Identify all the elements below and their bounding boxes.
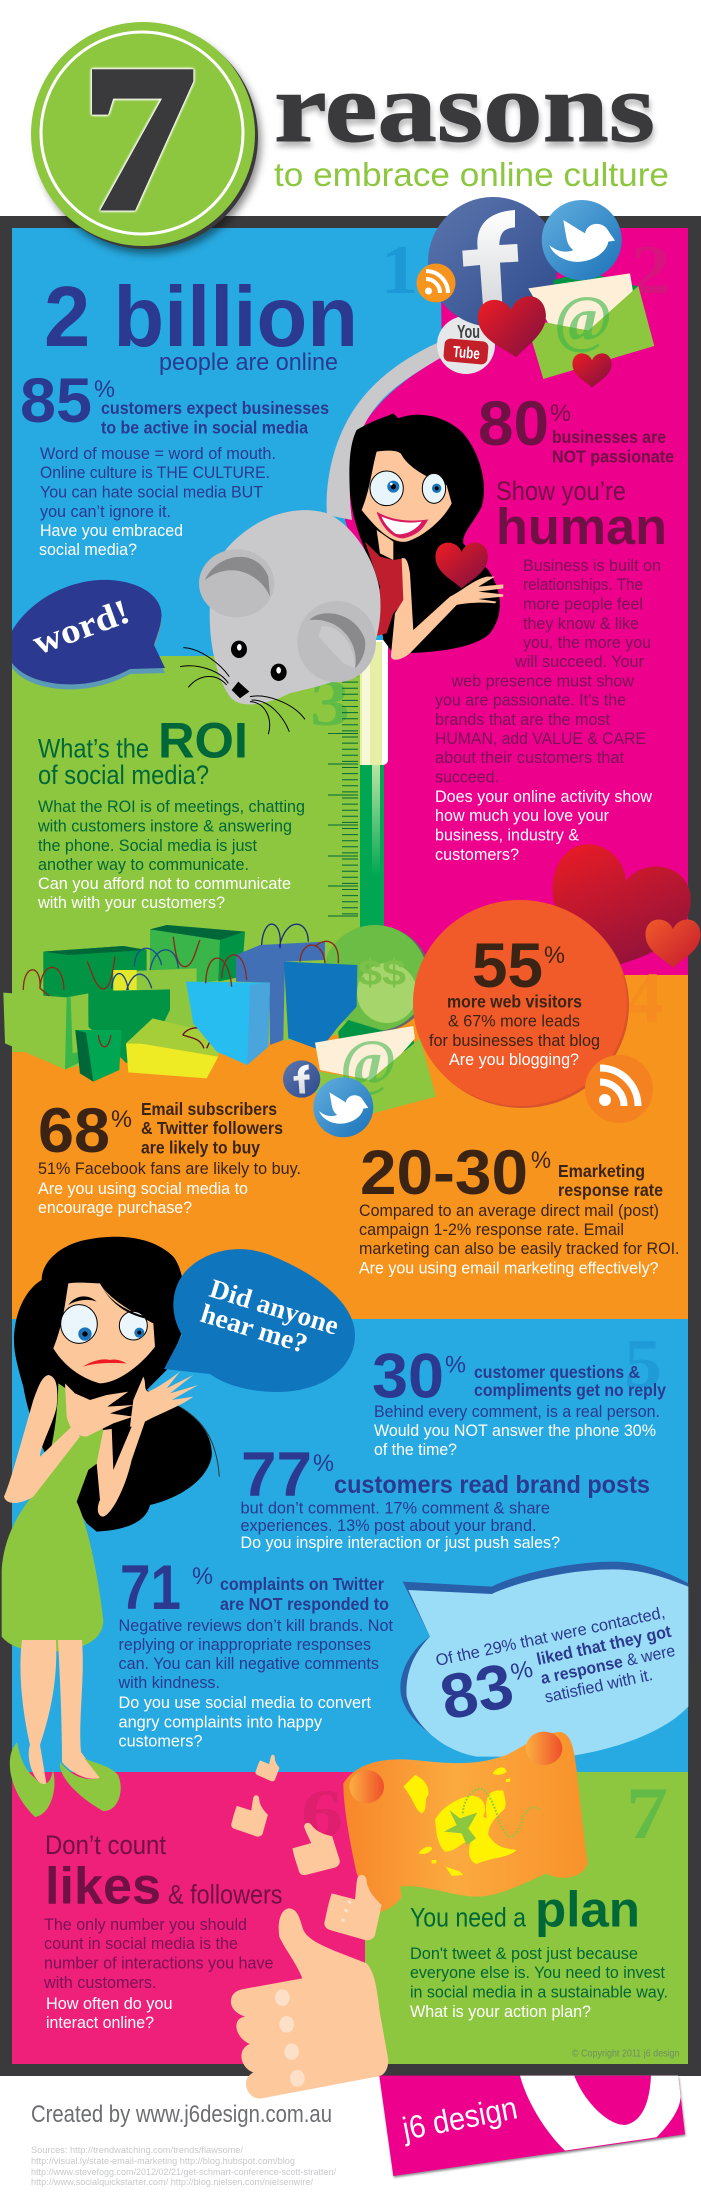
stat: 77%: experiences. 13% post about your brand.	[240, 1517, 536, 1535]
text: business relationships: they know & like	[523, 615, 639, 633]
stat: 20-30%: %	[531, 1147, 551, 1174]
sources: Sources: http://trendwatching.com/trends/flawsome/	[31, 2145, 243, 2156]
text: business relationships: more people feel	[523, 596, 643, 614]
stat: 68%: Are you using social media to	[38, 1180, 248, 1198]
stat: 85%: to be active in social media	[101, 418, 308, 438]
heading: don't count likes: & followers	[168, 1880, 282, 1910]
stat: 20-30%: Are you using email marketing effectively?	[359, 1260, 658, 1278]
text: business relationships	[435, 557, 661, 864]
panel: 55% circle: Are you blogging?	[449, 1051, 579, 1069]
title badge	[31, 22, 258, 252]
stat: 77%	[240, 1440, 650, 1552]
panel: 55% circle: more web visitors	[447, 992, 582, 1012]
text: business relationships: will succeed. Your	[514, 653, 644, 671]
sources: http://www.socialquickstarter.com/ http://blog.nielsen.com/nielsenwire/	[31, 2177, 313, 2188]
stat: 68%	[38, 1096, 301, 1217]
text: word of mouse: Word of mouse = word of mouth.	[40, 445, 276, 463]
stat: 30%: 30	[372, 1342, 444, 1412]
stat: 77%: Do you inspire interaction or just push sales?	[240, 1534, 560, 1552]
stat: 80%: NOT passionate	[552, 446, 674, 466]
stat: 20-30%	[359, 1138, 680, 1278]
panel: 55% circle	[413, 900, 629, 1108]
stat: 85%	[20, 366, 329, 438]
text: action plan: Don't tweet & post just because	[410, 1945, 638, 1963]
text: word of mouse: Have you embraced	[40, 522, 183, 540]
stat: 68%: & Twitter followers	[141, 1118, 283, 1138]
heading: don't count likes	[45, 1830, 282, 1916]
heading: don't count likes: likes	[45, 1858, 161, 1916]
heading: don't count likes: Don’t count	[45, 1830, 166, 1860]
callout: 83%: 83	[434, 1650, 519, 1734]
text: business relationships: relationships. The	[523, 576, 643, 594]
text: interactions: count in social media is the	[44, 1935, 238, 1953]
stat: 2 billion: people are online	[159, 349, 338, 376]
stat: 30%: of the time?	[374, 1441, 457, 1459]
stat: 80%: businesses are	[552, 427, 666, 447]
section numbers: 4	[626, 958, 663, 1038]
icon: treasure map	[343, 1732, 588, 1913]
heading: you need a plan: plan	[535, 1882, 640, 1938]
title badge: 7	[83, 25, 195, 252]
text: interactions: How often do you	[46, 1995, 172, 2013]
text: action plan: in social media in a sustainable way.	[410, 1984, 668, 2002]
section numbers: 5	[624, 1326, 662, 1403]
text: ROI: with customers instore & answering	[37, 818, 292, 836]
stat: 20-30%: Compared to an average direct mail (post)	[359, 1202, 659, 1220]
stat: 71%: 71	[120, 1553, 181, 1623]
stat: 77%: but don’t comment. 17% comment & share	[240, 1500, 550, 1518]
heading: what's the ROI: of social media?	[38, 760, 209, 790]
text: ROI: What the ROI is of meetings, chatting	[38, 798, 305, 816]
text: word of mouse: you can’t ignore it.	[40, 503, 171, 521]
text: business relationships: succeed.	[435, 768, 499, 786]
stat: 30%: compliments get no reply	[474, 1380, 666, 1400]
thermometer	[322, 640, 431, 1032]
heading: you need a plan	[410, 1882, 640, 1938]
sources: http://www.stevefogg.com/2012/02/21/get-schmart-conference-scott-stratten/	[31, 2167, 336, 2178]
stat: 85%: %	[94, 376, 115, 403]
icon: YouTube: Tube	[452, 344, 481, 363]
text: business relationships: customers?	[435, 846, 519, 864]
stat: 20-30%: response rate	[558, 1180, 663, 1200]
icon: thumbs up small 2	[231, 1794, 269, 1837]
logo card: j6 design	[379, 2076, 685, 2176]
text: action plan	[410, 1945, 668, 2021]
heading: what's the ROI	[38, 712, 248, 790]
text: interactions: number of interactions you have	[44, 1954, 274, 1972]
icon: large heart	[529, 836, 700, 996]
stat: 20-30%: campaign 1-2% response rate. Email	[359, 1221, 624, 1239]
sources	[31, 2145, 336, 2188]
stat: 20-30%: Emarketing	[558, 1161, 645, 1181]
icon: envelope	[528, 272, 654, 379]
text: word of mouse: social media?	[39, 541, 137, 559]
section numbers: 2	[631, 232, 671, 309]
icon: Facebook	[428, 197, 558, 327]
character: smiling woman	[349, 413, 503, 660]
speech bubble: did anyone hear me: hear me?	[197, 1298, 311, 1359]
stat: 30%: customer questions &	[474, 1362, 640, 1382]
stat: 71%: with kindness.	[118, 1674, 220, 1692]
character: mouse	[180, 510, 381, 734]
heading: show you're human: Show you’re	[496, 476, 626, 506]
section numbers: 7	[626, 1773, 668, 1855]
text: word of mouse: You can hate social media BUT	[40, 484, 263, 502]
stat: 71%: Negative reviews don’t kill brands. Not	[118, 1617, 393, 1635]
text: ROI	[37, 798, 305, 912]
title: reasons	[274, 52, 655, 163]
stat: 80%: %	[550, 400, 571, 427]
icon: heart large	[476, 295, 550, 361]
stat: 77%: %	[313, 1450, 334, 1477]
stat: 30%: Would you NOT answer the phone 30%	[374, 1422, 656, 1440]
text: business relationships: Business is built on	[523, 557, 661, 575]
icon: small orange heart	[646, 920, 700, 968]
stat: 2 billion: 2 billion	[44, 270, 358, 365]
text: interactions	[43, 1916, 274, 2032]
logo card: j6 design: j6 design	[399, 2089, 520, 2147]
icon: envelope: @	[554, 283, 612, 355]
sources: http://visual.ly/state-email-marketing http://blog.hubspot.com/blog	[31, 2156, 295, 2167]
icon: thumbs up small 4	[324, 1875, 382, 1940]
icon: YouTube	[437, 316, 495, 374]
stat: 71%: replying or inappropriate responses	[118, 1636, 371, 1654]
text: ROI: with with your customers?	[37, 894, 225, 912]
section numbers	[301, 232, 671, 1855]
text: ROI: the phone. Social media is just	[38, 837, 257, 855]
stat: 68%: %	[111, 1106, 132, 1133]
stat: 68%: are likely to buy	[141, 1138, 260, 1158]
text: business relationships: you, the more you	[523, 634, 651, 652]
stat: 77%: customers read brand posts	[334, 1471, 650, 1499]
callout: 83%: satisfied with it.	[543, 1666, 654, 1707]
text: business relationships: about their customers that	[435, 749, 624, 767]
section numbers: 6	[301, 1775, 343, 1851]
text: word of mouse: Online culture is THE CULTURE.	[40, 464, 270, 482]
section numbers: 3	[310, 667, 350, 740]
stat: 71%: can. You can kill negative comments	[118, 1655, 379, 1673]
callout: 83%	[400, 1562, 688, 1757]
copyright: © Copyright 2011 j6 design	[572, 2048, 680, 2060]
stat: 71%: are NOT responded to	[220, 1594, 389, 1614]
shopping bags	[3, 924, 357, 1082]
stat: 71%	[118, 1553, 393, 1750]
stat: 71%: Do you use social media to convert	[118, 1694, 371, 1712]
icon: heart small	[572, 353, 612, 388]
stat: 20-30%: marketing can also be easily tracked for ROI.	[359, 1240, 680, 1258]
thermometer: $$	[358, 952, 406, 993]
heading: show you're human: human	[496, 498, 667, 555]
text: ROI: another way to communicate.	[38, 856, 249, 874]
stat: 30%	[372, 1342, 666, 1459]
text: business relationships: brands that are the most	[435, 711, 610, 729]
heading: what's the ROI: ROI	[158, 712, 248, 768]
heading: you need a plan: You need a	[410, 1902, 527, 1932]
stat: 68%: 68	[38, 1096, 110, 1166]
speech bubble: word!: word!	[27, 592, 135, 663]
icon: thumbs up small 3	[280, 1815, 346, 1884]
stat: 80%	[478, 389, 674, 466]
stat: 68%: Email subscribers	[141, 1099, 277, 1119]
speech bubble: word!	[12, 580, 165, 689]
text: action plan: everyone else is. You need to invest	[410, 1964, 665, 1982]
mouse cord	[327, 343, 442, 520]
stat: 71%: angry complaints into happy	[118, 1714, 323, 1732]
text: ROI: Can you afford not to communicate	[38, 875, 291, 893]
stat: 30%: %	[445, 1352, 466, 1378]
heading: what's the ROI: What’s the	[38, 734, 149, 764]
stat: 20-30%: 20-30	[360, 1138, 528, 1208]
stat: 85%: customers expect businesses	[101, 398, 329, 418]
panel: 55% circle: for businesses that blog	[429, 1032, 600, 1050]
text: interactions: with customers.	[43, 1974, 156, 1992]
stat: 30%: Behind every comment, is a real person.	[374, 1403, 660, 1421]
text: business relationships: HUMAN, add VALUE & CARE	[435, 730, 646, 748]
section numbers: 1	[381, 232, 418, 309]
text: business relationships: Does your online activity show	[435, 788, 652, 806]
text: interactions: interact online?	[46, 2014, 154, 2032]
credit: Created by www.j6design.com.au	[31, 2101, 332, 2128]
stat: 71%: complaints on Twitter	[220, 1574, 384, 1594]
stat: 71%: customers?	[118, 1732, 202, 1750]
text: action plan: What is your action plan?	[410, 2003, 591, 2021]
stat: 71%: %	[192, 1563, 213, 1590]
text: business relationships: web presence must show	[451, 672, 634, 690]
panel: 55% circle: %	[544, 942, 565, 969]
text: business relationships: how much you love your	[435, 807, 609, 825]
icon: thumbs up small 1	[254, 1753, 281, 1782]
icon: Twitter	[542, 200, 622, 280]
speech bubble: did anyone hear me	[164, 1249, 355, 1392]
text: business relationships: business, industry &	[435, 826, 579, 844]
callout: 83%: %	[508, 1656, 535, 1687]
stat: 77%: 77	[241, 1440, 312, 1510]
icon: YouTube: You	[457, 322, 480, 342]
callout: 83%: Of the 29% that were contacted,	[434, 1604, 667, 1670]
text: interactions: The only number you should	[44, 1916, 247, 1934]
icon: envelope and social badges	[283, 1020, 436, 1137]
callout: 83%: liked that they got	[535, 1622, 673, 1669]
panel: 55% circle: & 67% more leads	[448, 1012, 580, 1030]
panel: 55% circle: 55	[472, 931, 543, 1001]
text: business relationships: you are passionate. It’s the	[435, 692, 626, 710]
icon: large RSS	[585, 1055, 653, 1123]
icon: envelope and social badges: @	[340, 1027, 397, 1097]
icon: RSS	[416, 264, 456, 302]
speech bubble: did anyone hear me: Did anyone	[206, 1273, 342, 1341]
stat: 68%: 51% Facebook fans are likely to buy.	[38, 1160, 301, 1178]
callout: 83%: a response & were	[539, 1642, 677, 1688]
text: word of mouse	[39, 445, 276, 559]
icon: thumbs up large	[231, 1908, 388, 2098]
stat: 85%: 85	[20, 366, 92, 436]
subtitle: to embrace online culture	[274, 156, 669, 193]
stat: 68%: encourage purchase?	[38, 1199, 192, 1217]
character: worried woman	[2, 1237, 219, 1817]
stat: 80%: 80	[478, 389, 549, 459]
